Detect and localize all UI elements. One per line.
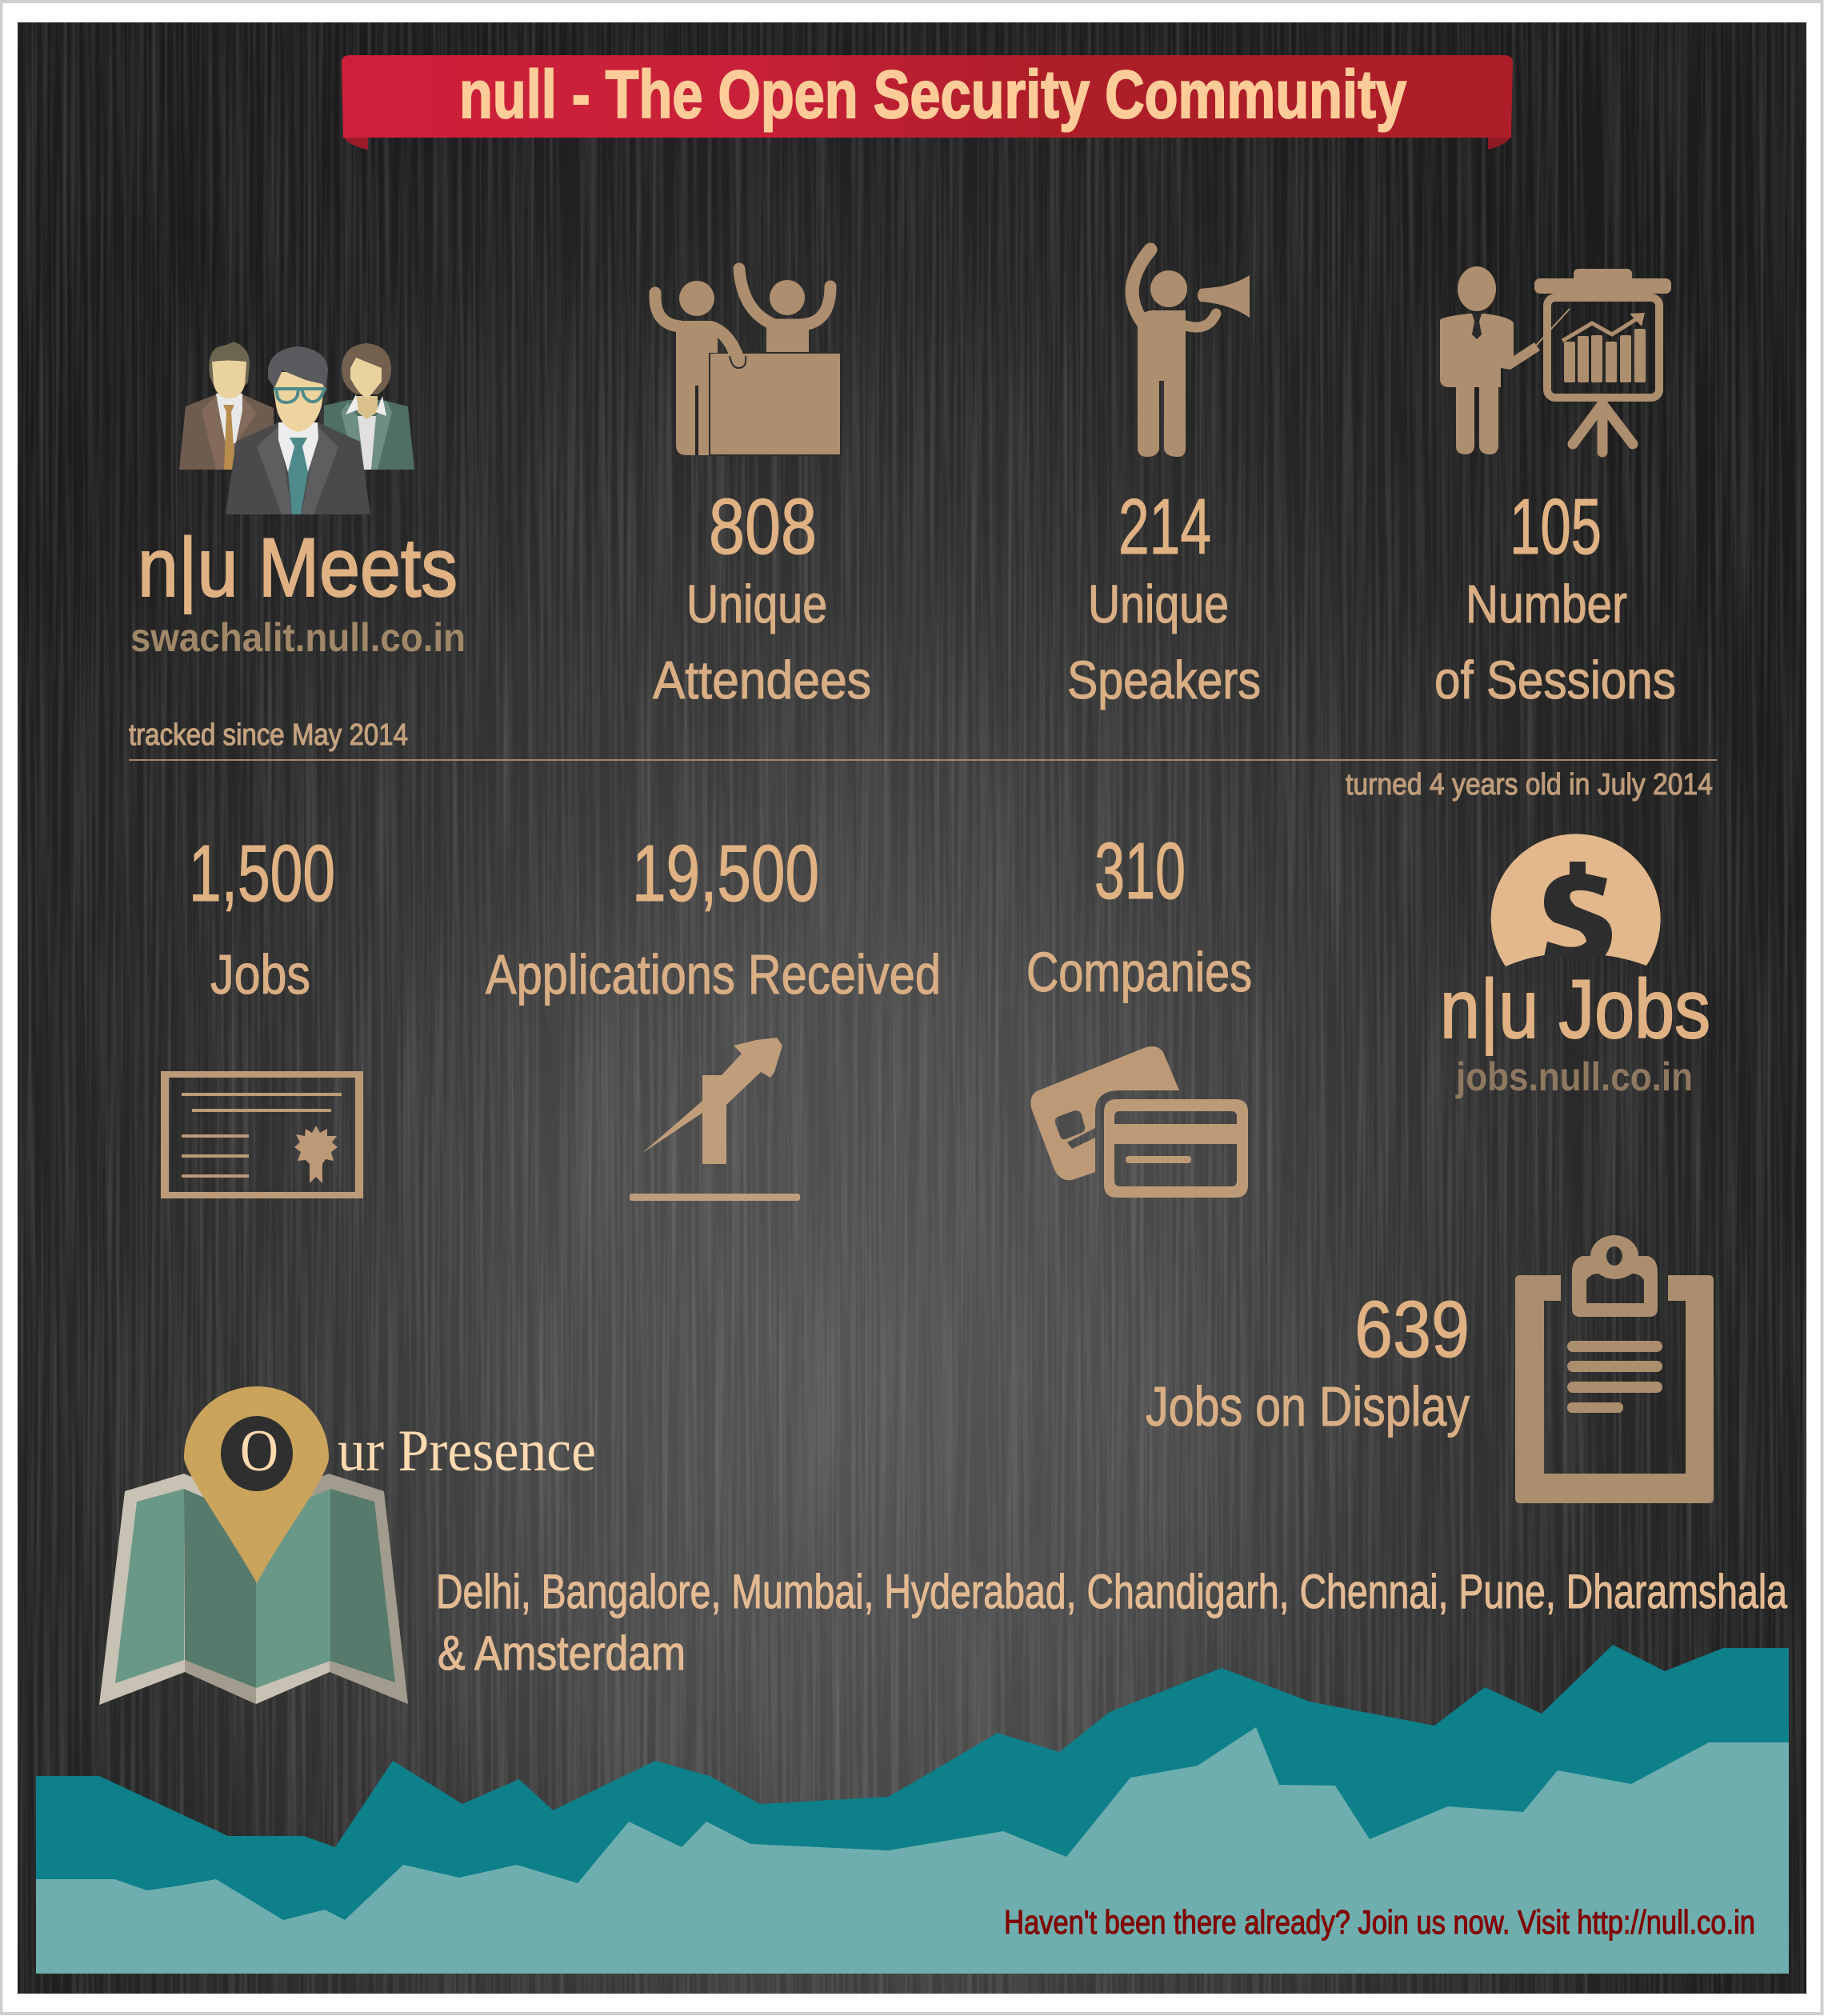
stat: unique attendees: 808 — [709, 482, 817, 570]
stat: unique attendees: Attendees — [653, 650, 871, 710]
link: jobs: jobs.null.co.in — [1455, 1054, 1693, 1099]
heading: our presence: ur Presence — [338, 1418, 596, 1484]
icon: speaker with megaphone — [1132, 250, 1250, 457]
area: light teal — [36, 1727, 1789, 1974]
stat: unique speakers: Speakers — [1067, 650, 1261, 710]
icon: presenter with chart board — [1440, 266, 1671, 454]
icon: folded map with pin — [99, 1386, 408, 1705]
stat: companies: Companies — [1026, 941, 1252, 1003]
text: city list — [436, 1565, 1787, 1680]
stat: unique attendees: Unique — [686, 574, 827, 634]
note: tracked since: tracked since May 2014 — [129, 718, 408, 752]
stat: jobs: Jobs — [210, 943, 310, 1006]
heading: our presence: O — [240, 1418, 278, 1484]
stat: jobs: 1,500 — [189, 829, 335, 918]
person: left man — [179, 342, 274, 470]
title: null - The Open Security Community — [459, 57, 1406, 132]
heading: n|u Jobs with money bag — [1440, 834, 1710, 1099]
person: right woman — [323, 343, 414, 470]
stat: unique speakers — [1067, 482, 1261, 710]
icon: certificate — [161, 1071, 363, 1198]
icon: team of people — [179, 342, 414, 514]
stat: jobs — [189, 829, 335, 1006]
note: turned 4 years old: turned 4 years old in July 2014 — [1346, 768, 1713, 802]
stat: number of sessions: Number — [1466, 574, 1627, 634]
stat: jobs on display: Jobs on Display — [1146, 1375, 1470, 1438]
heading: n|u Meets — [130, 522, 466, 660]
stat: number of sessions — [1434, 482, 1676, 710]
stat: jobs on display: 639 — [1354, 1285, 1470, 1374]
heading: our presence — [240, 1418, 596, 1484]
link: swachalit: swachalit.null.co.in — [130, 615, 466, 660]
area: dark teal — [36, 1645, 1789, 1974]
stat: jobs on display — [1146, 1285, 1470, 1438]
stat: number of sessions: 105 — [1510, 482, 1602, 570]
icon: clipboard — [1515, 1235, 1714, 1503]
heading: n|u Meets: n|u Meets — [138, 522, 458, 614]
stat: unique speakers: Unique — [1088, 574, 1229, 634]
map pin — [184, 1386, 329, 1583]
icon: attendees — [655, 269, 841, 455]
person: centre man — [226, 346, 370, 514]
title ribbon — [342, 55, 1513, 150]
icon: money bag — [1491, 834, 1661, 966]
stat: unique speakers: 214 — [1118, 482, 1211, 570]
icon: credit cards — [1030, 1046, 1248, 1198]
heading: n|u Jobs with money bag: n|u Jobs — [1440, 963, 1710, 1056]
stat: applications received: 19,500 — [632, 829, 819, 918]
stat: companies — [1026, 826, 1252, 1003]
stat: applications received: Applications Received — [486, 943, 941, 1006]
area chart: mountain silhouette — [36, 1645, 1789, 1974]
stat: number of sessions: of Sessions — [1434, 650, 1676, 710]
stat: unique attendees — [653, 482, 871, 710]
stat: companies: 310 — [1094, 826, 1186, 916]
text: city list: & Amsterdam — [438, 1626, 686, 1680]
stat: applications received — [486, 829, 941, 1006]
icon: rising arrow — [630, 1038, 800, 1201]
